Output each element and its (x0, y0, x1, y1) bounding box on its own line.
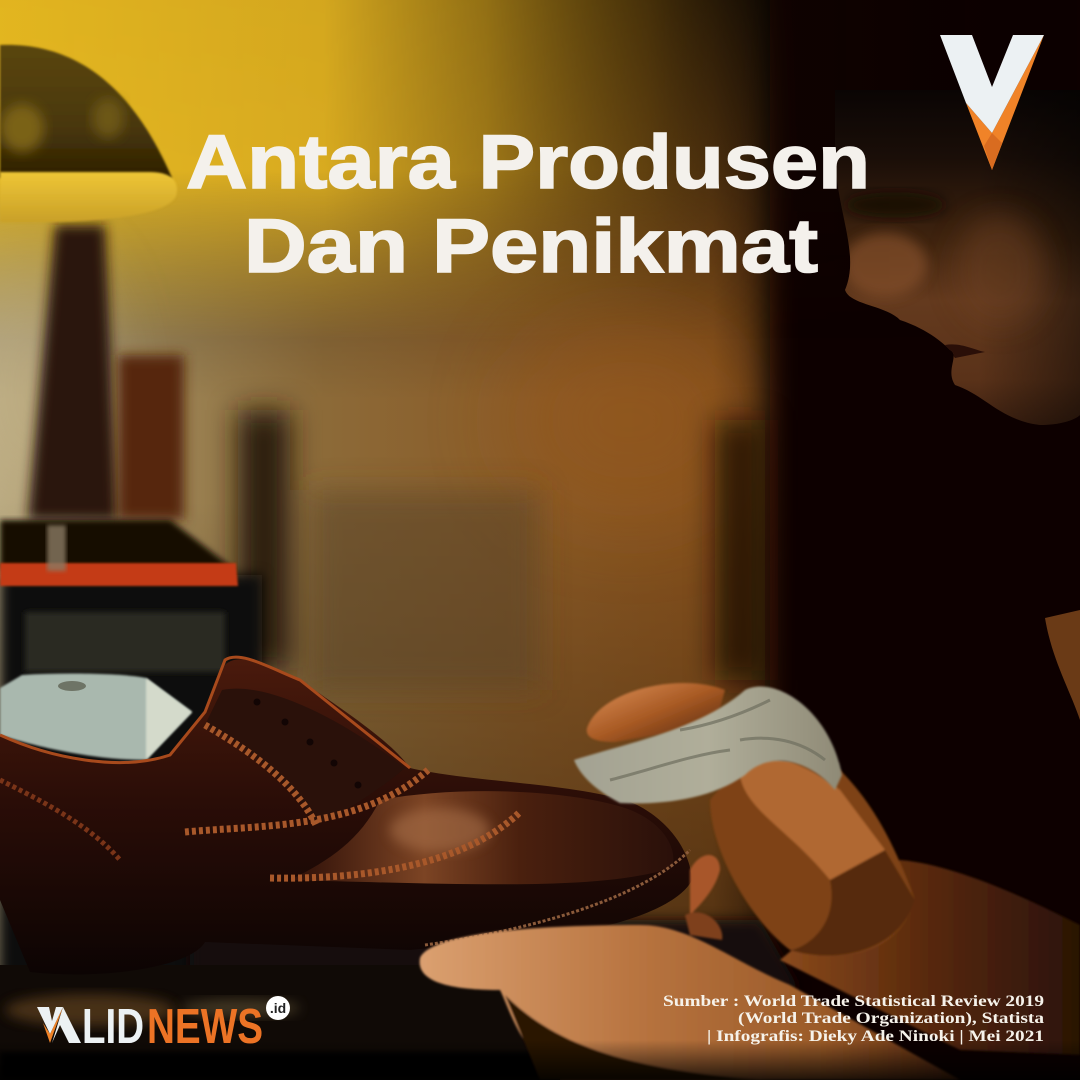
shoe welt line (425, 850, 690, 945)
.id badge (266, 996, 290, 1020)
dark area behind shoe and hands (190, 920, 800, 990)
collar edge (0, 657, 410, 768)
source credit: Sumber : World Trade Statistical Review 2019 (663, 993, 1044, 1010)
shoe body (0, 659, 692, 974)
source credit: (World Trade Organization), Statista (738, 1010, 1044, 1027)
index finger (587, 683, 725, 742)
shoe (0, 657, 692, 974)
source credit (663, 993, 1044, 1045)
logo: Validnews.id: NEWS (147, 1000, 263, 1054)
polishing cloth (574, 687, 842, 803)
desk lamp (0, 45, 235, 570)
lower hand holding shoe (420, 855, 960, 1080)
logo: Validnews.id: LID (82, 1000, 144, 1054)
brogue stitching (185, 725, 520, 878)
lamp stem (28, 225, 118, 520)
upper hand and forearm (587, 683, 1080, 1055)
title: Dan Penikmat (244, 204, 818, 289)
man's face in profile (835, 116, 1080, 425)
logo: V mark (940, 35, 1044, 170)
workbench (0, 965, 560, 1080)
forearm (780, 860, 1080, 1055)
blurred picture frame on wall (238, 410, 765, 690)
.id badge: .id (270, 1000, 286, 1016)
shoe tree block (0, 674, 192, 760)
source credit: | Infografis: Dieky Ade Ninoki | Mei 2021 (707, 1028, 1044, 1045)
lace eyelets (254, 698, 362, 788)
background: blurred workshop wall (0, 0, 790, 1080)
blurred box behind lamp (118, 355, 184, 520)
back of hand (710, 760, 915, 956)
title (186, 120, 870, 289)
bottom vignette for credit text (0, 1040, 1080, 1080)
lamp base (0, 520, 235, 570)
shelf with red strip (0, 525, 262, 995)
sleeve at right edge (1045, 610, 1080, 720)
hand shadow (790, 850, 915, 956)
shoe shaft panel (205, 689, 405, 825)
lamp dome (0, 45, 172, 178)
shoe toe shine (290, 791, 673, 884)
logo: Validnews.id (37, 996, 290, 1054)
lamp light opening (0, 172, 177, 222)
thumb (740, 759, 885, 880)
title: Antara Produsen (186, 120, 870, 205)
